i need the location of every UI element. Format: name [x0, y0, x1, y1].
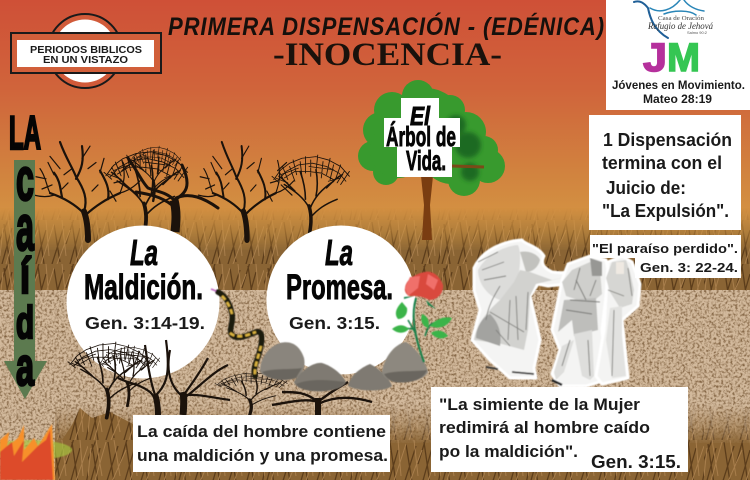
text: jovenes en movimiento: Jóvenes en Movimiento. [612, 80, 745, 92]
text: line 4: "La Expulsión". [602, 201, 729, 221]
text: El: El [410, 101, 431, 131]
panel: la simiente [431, 387, 688, 472]
logo panel [606, 0, 750, 110]
trunk [421, 176, 433, 240]
heading: LA: LA [9, 106, 41, 159]
letter d: d [16, 297, 34, 348]
icon: snake [211, 289, 262, 376]
text: Arbol de: Árbol de [386, 121, 456, 152]
text: badge line 1: PERIODOS BIBLICOS [30, 44, 142, 56]
text: gen 3:15: Gen. 3:15. [591, 452, 681, 472]
figure: angel [472, 240, 586, 378]
arrow: la caida [4, 146, 47, 399]
letter a: a [16, 337, 35, 397]
icon: red rose [392, 272, 452, 362]
reference: Gen 3:14-19: Gen. 3:14-19. [85, 313, 205, 333]
text: line 3: po la maldición". [439, 442, 578, 461]
text: line 1: "La simiente de la Mujer [439, 395, 640, 414]
letter a: a [16, 192, 34, 264]
upper dry grass band [0, 208, 750, 290]
logo: J: J [643, 36, 667, 80]
text: mateo: Mateo 28:19 [643, 94, 712, 106]
heading: Maldicion: Maldición. [84, 268, 203, 307]
text: line 2: termina con el [602, 153, 722, 173]
icon: flames [0, 424, 72, 480]
sand ground [0, 290, 750, 480]
heading: La: La [130, 232, 158, 273]
white circle: la maldicion [66, 226, 220, 378]
branches [432, 160, 484, 167]
heading: La: La [325, 232, 353, 273]
text: line 1: 1 Dispensación [603, 130, 732, 150]
text: line 2: redimirá al hombre caído [439, 418, 650, 437]
text: gen 3:22-24: Gen. 3: 22-24. [640, 260, 738, 275]
text: badge line 2: EN UN VISTAZO [43, 54, 128, 66]
lower dry grass band [55, 405, 750, 480]
subtitle: inocencia: -INOCENCIA- [273, 37, 502, 73]
white cross label [384, 98, 460, 177]
text: casa de oracion: Casa de Oración [658, 16, 704, 22]
text: refugio de jehova: Refugio de Jehová [647, 21, 713, 32]
reference: Gen 3:15: Gen. 3:15. [289, 313, 380, 333]
panel: paraiso perdido [590, 235, 741, 278]
sky background [0, 0, 750, 252]
heading: Promesa: Promesa. [286, 268, 393, 307]
figures: angel expelling Adam and Eve [472, 240, 640, 386]
white circle: la promesa [266, 226, 416, 374]
letter i: í [20, 248, 32, 304]
tree of life [358, 80, 505, 240]
icon: dove [634, 0, 704, 38]
text: el paraiso perdido: "El paraíso perdido". [592, 241, 738, 256]
badge: periodos biblicos [11, 14, 161, 88]
canopy shading [446, 115, 481, 181]
figure: Adam [552, 256, 610, 386]
panel: juicio [589, 115, 741, 230]
logo: M: M [667, 36, 700, 80]
letter c: c [16, 146, 34, 213]
lower bare trees [68, 340, 372, 418]
upper bare trees [34, 142, 349, 240]
text: salmo: Salmo 90:2 [687, 30, 708, 35]
icon: rocks [260, 342, 428, 391]
panel: la caida del hombre [133, 415, 390, 472]
text: line 3: Juicio de: [606, 178, 686, 198]
canopy [358, 80, 505, 196]
text: line 1: La caída del hombre contiene [137, 423, 386, 441]
figure: Eve [596, 256, 640, 384]
title: primera dispensacion: PRIMERA DISPENSACIÓN - (EDÉNICA) [168, 12, 605, 41]
text: Vida: Vida. [406, 145, 446, 176]
text: line 2: una maldición y una promesa. [137, 447, 388, 465]
